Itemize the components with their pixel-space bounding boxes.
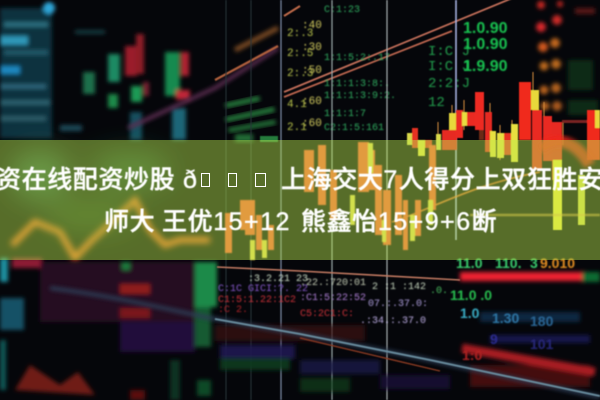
green and yellow figures on the screen: 1:1:1:3:8:. [324,79,390,90]
green and yellow figures on the screen: 12 [428,95,445,111]
green and yellow figures on the screen: C:1:23 [324,5,360,16]
lower right price figures: 11.0 .0 [450,287,492,303]
title line 2: second segment: 王优15+12 [162,208,291,236]
green and yellow figures on the screen: 2:.3 [287,28,313,40]
lower green, purple and red ticker rows: .0. [430,286,448,297]
lower right price figures: 1.30 [492,310,519,326]
olive translucent band [0,140,600,260]
lower green, purple and red ticker rows: :C 2. [218,305,248,316]
lower right price figures: 3 [530,255,538,271]
lower right price figures: 1:0 [462,347,482,363]
lower right price figures: 9 [490,331,498,347]
vertical light rules [226,0,456,400]
green and yellow figures on the screen: :50 [302,65,322,77]
green and yellow figures on the screen: 1:1:5:2:.17 [324,53,390,64]
lower right price figures: 9.010 [540,255,575,271]
green bokeh, left of band [10,150,170,231]
lower green, purple and red ticker rows: :3.2.21 23 [248,274,308,285]
green and yellow figures on the screen: :60 [302,118,322,130]
green and yellow figures on the screen: :40 [302,20,322,32]
green price figures 1.0.90: 1.0.90 [463,20,508,37]
lower left dim red and teal blocks [0,258,600,400]
red and orange market dots [536,1,598,115]
left blue data column [0,2,105,138]
lower reflected trend lines [50,267,600,397]
lower green, purple and red ticker rows [218,274,448,327]
title: two-line white headline [0,166,600,236]
lower green, purple and red ticker rows: .22.:720:01 [300,278,366,289]
green and yellow figures on the screen: 2:.5 [287,48,313,60]
green and yellow figures on the screen: 2:.3 [287,68,313,80]
green price figures 1.0.90: 1.9.90 [463,58,508,75]
blurred background candles [60,34,190,140]
green and yellow figures on the screen: :60 [302,96,322,108]
green and yellow figures on the screen: 2.1 [287,122,307,134]
lower right price figures: 11.0 [456,255,483,271]
lower green, purple and red ticker rows: .:34.:.37.0 [360,316,426,327]
green and yellow figures on the screen: 1:1:1:3:9:2. [324,91,396,102]
green and yellow figures on the screen: C2:1:5:161 [324,123,384,134]
green and yellow figures on the screen: 1:1:1:7 [324,109,366,120]
green price figures 1.0.90: 1.0.90 [463,36,508,53]
lower right price figures: 101 [530,336,554,352]
green and yellow figures on the screen: 2:2:J [428,76,470,92]
lower green, purple and red ticker rows: 2 :1 :142 [372,282,426,293]
lower green, purple and red ticker rows: :C1:5:22:52 [300,293,366,304]
title line 1: right part: 上海交大7人得分上双狂胜安 [281,166,600,194]
blurred gold wave, left of band [12,200,210,258]
green data rows, left of centre [225,96,278,142]
title line 1: left part: 资在线配资炒股 [0,166,175,194]
lower green, purple and red ticker rows: 07.:.37.0: [368,299,428,310]
title line 2: third segment: 熊鑫怡15+9+6断 [301,208,497,236]
upper candlestick chart, right side [407,72,600,230]
green and yellow figures on the screen: I:C J [428,59,470,75]
lower right price figures [450,255,575,363]
green and yellow figures on the screen: 4.1 [287,99,307,111]
title line 1: mis-encoded glyphs: ð [183,166,198,194]
lower right price figures: 180 [530,313,554,329]
green price figures 1.0.90 [463,20,508,75]
lower candlestick chart through the band [225,142,600,260]
lower green, purple and red ticker rows: C:1C GICI:?. 22 [218,284,308,295]
green and yellow figures on the screen: I:C J [428,44,470,60]
title line 2: first segment: 师大 [104,208,155,236]
lower right price figures: 110. [495,255,521,271]
lower green, purple and red ticker rows: C1:5:1.22:1C2 [218,295,296,306]
lower green, purple and red ticker rows: C5:2C1:C: [300,309,354,320]
title line 1: mis-encoded glyphs [183,166,266,194]
green and yellow figures on the screen [287,5,470,134]
lower right price figures: 1.0 [460,305,480,321]
diagonal trend lines, blurred [128,0,515,128]
green and yellow figures on the screen: :30 [302,42,322,54]
